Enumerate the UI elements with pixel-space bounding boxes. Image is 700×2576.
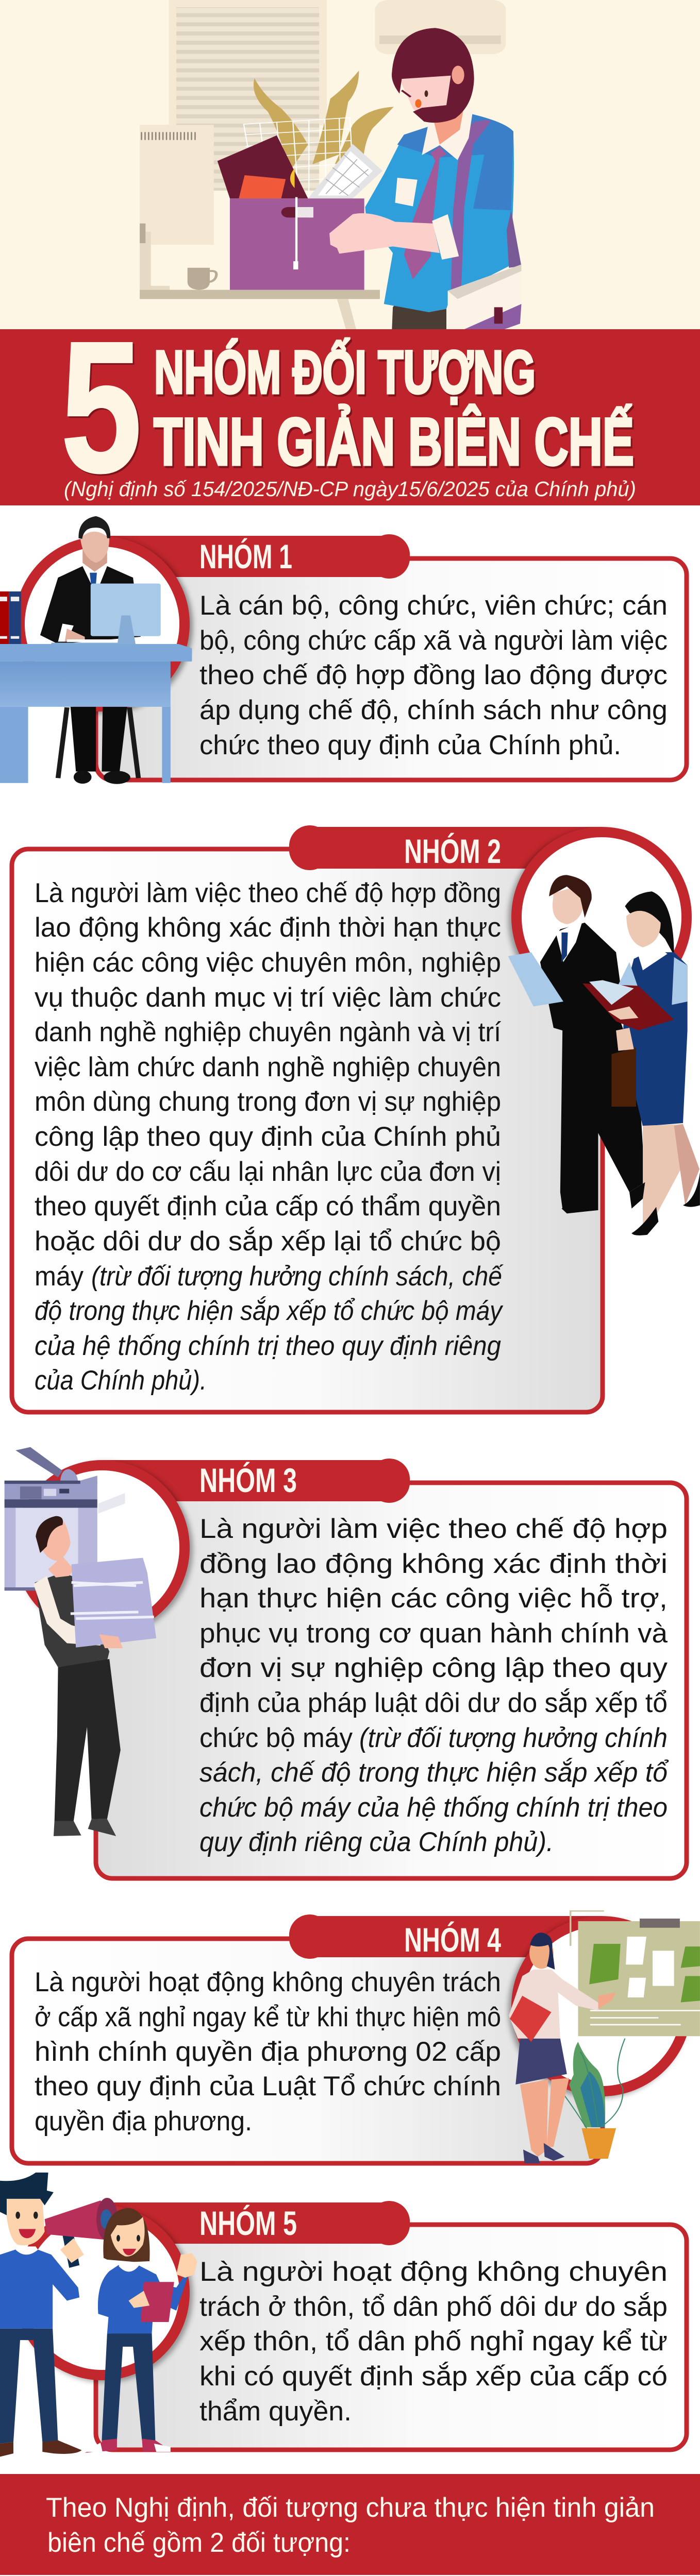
ring [20,541,185,706]
text block: Là người hoạt động không chuyên trách [35,1967,501,1997]
text block: theo quyết định của cấp có thẩm quyền [35,1191,501,1222]
plant leaves [254,71,394,171]
text block: thẩm quyền. [199,2396,352,2427]
heading pill [103,1459,410,1503]
subtitle: (Nghị định số 154/2025/NĐ-CP ngày15/6/2025 của Chính phủ) [64,477,636,501]
text block: chức theo quy định của Chính phủ. [199,730,621,760]
text block: lao động không xác định thời hạn thực [35,912,501,943]
text block: (trừ đối tượng hưởng chính [359,1723,668,1753]
text block: Là người làm việc theo chế độ hợp đồng [35,878,501,908]
text block: môn dùng chung trong đơn vị sự nghiệp [35,1087,501,1117]
title band [0,302,700,511]
text block: chức bộ máy của hệ thống chính trị theo [199,1792,668,1823]
text block: đồng lao động không xác định thời [199,1549,668,1579]
text block: quy định riêng của Chính phủ). [199,1827,554,1857]
text block: quyền địa phương. [35,2106,252,2137]
text block [199,2257,668,2427]
hero illustration [0,0,700,330]
desk and monitor [140,125,380,329]
text block: khi có quyết định sắp xếp của cấp có [199,2361,668,2392]
icon: clerk with paper stack and copier [5,1447,156,1836]
text block: đơn vị sự nghiệp công lập theo quy [199,1653,668,1683]
text block: theo chế độ hợp đồng lao động được [199,660,668,690]
icon: two office workers [508,875,700,1235]
text block: định của pháp luật dôi dư do sắp xếp tổ [199,1688,668,1718]
ring [516,1921,687,2091]
text block [35,878,504,1396]
text block: ở cấp xã nghỉ ngay kể từ khi thực hiện mô [35,2002,501,2032]
text block: của Chính phủ). [35,1365,207,1396]
heading: NHÓM 4 [404,1921,501,1959]
wire grid [244,117,352,197]
heading pill [289,825,602,870]
text block: dôi dư do cơ cấu lại nhân lực của đơn vị [35,1157,501,1187]
heading: NHÓM 1 [199,537,292,575]
heading: NHÓM 5 [199,2204,297,2242]
text block: xếp thôn, tổ dân phố nghỉ ngay kể từ [199,2326,668,2357]
text block: công lập theo quy định của Chính phủ [35,1122,501,1152]
shoulder bag [448,264,521,329]
text block: theo quy định của Luật Tổ chức chính [35,2071,501,2102]
text block: phục vụ trong cơ quan hành chính và [199,1618,668,1649]
heading: NHÓM 3 [199,1461,297,1499]
ring [516,832,687,1002]
text block: của hệ thống chính trị theo quy định riêng [35,1331,501,1361]
panel: nhóm 5 [0,2173,687,2457]
icon: two people with megaphone [0,2173,197,2457]
section banner [0,2474,700,2575]
text block [199,1514,669,1857]
cardboard box [230,197,364,290]
icon: woman presenting at notice board [509,1911,700,2163]
text block: Là người làm việc theo chế độ hợp [199,1514,668,1544]
text block: hạn thực hiện các công việc hỗ trợ, [199,1583,668,1614]
text block: hiện các công việc chuyên môn, nghiệp [35,947,501,978]
panel: nhóm 3 [5,1447,687,1878]
panel: nhóm 4 [12,1911,700,2163]
text block [199,590,668,760]
panel: nhóm 1 [0,516,687,784]
section banner: Theo Nghị định, đối tượng chưa thực hiện tinh giản [46,2493,655,2523]
text block: máy [35,1261,84,1292]
box contents [218,135,382,198]
text block: Là người hoạt động không chuyên [199,2257,668,2287]
text block: vụ thuộc danh mục vị trí việc làm chức [35,982,501,1013]
text block: áp dụng chế độ, chính sách như công [199,695,668,725]
section banner: biên chế gồm 2 đối tượng: [47,2528,351,2558]
panel: nhóm 2 [12,825,700,1412]
ring [20,1465,185,1630]
text block: trách ở thôn, tổ dân phố dôi dư do sắp [199,2292,668,2322]
title text: NHÓM ĐỐI TƯỢNG [154,338,536,406]
heading pill [103,2201,410,2245]
text block: (trừ đối tượng hưởng chính sách, chế [91,1261,504,1292]
heading pill [289,1914,602,1959]
text block: độ trong thực hiện sắp xếp tổ chức bộ máy [35,1296,504,1326]
heading: NHÓM 2 [404,832,501,870]
ring [20,2210,185,2375]
title text [154,338,634,479]
text block: việc làm chức danh nghề nghiệp chuyên [35,1052,501,1082]
text block: hoặc dôi dư do sắp xếp lại tổ chức bộ [35,1226,501,1257]
text block: danh nghề nghiệp chuyên ngành và vị trí [35,1017,501,1047]
window blinds [169,0,327,191]
text block: sách, chế độ trong thực hiện sắp xếp tổ [199,1757,669,1788]
text block: bộ, công chức cấp xã và người làm việc [199,625,668,656]
heading pill [103,534,410,579]
man carrying box [329,28,521,329]
text block: hình chính quyền địa phương 02 cấp [35,2037,501,2067]
big number 5: 5 [61,302,142,511]
icon: man at desk [0,516,192,784]
text block: Là cán bộ, công chức, viên chức; cán [199,590,668,621]
air conditioner [375,0,506,54]
text block [35,1967,501,2137]
text block: chức bộ máy [199,1723,353,1753]
